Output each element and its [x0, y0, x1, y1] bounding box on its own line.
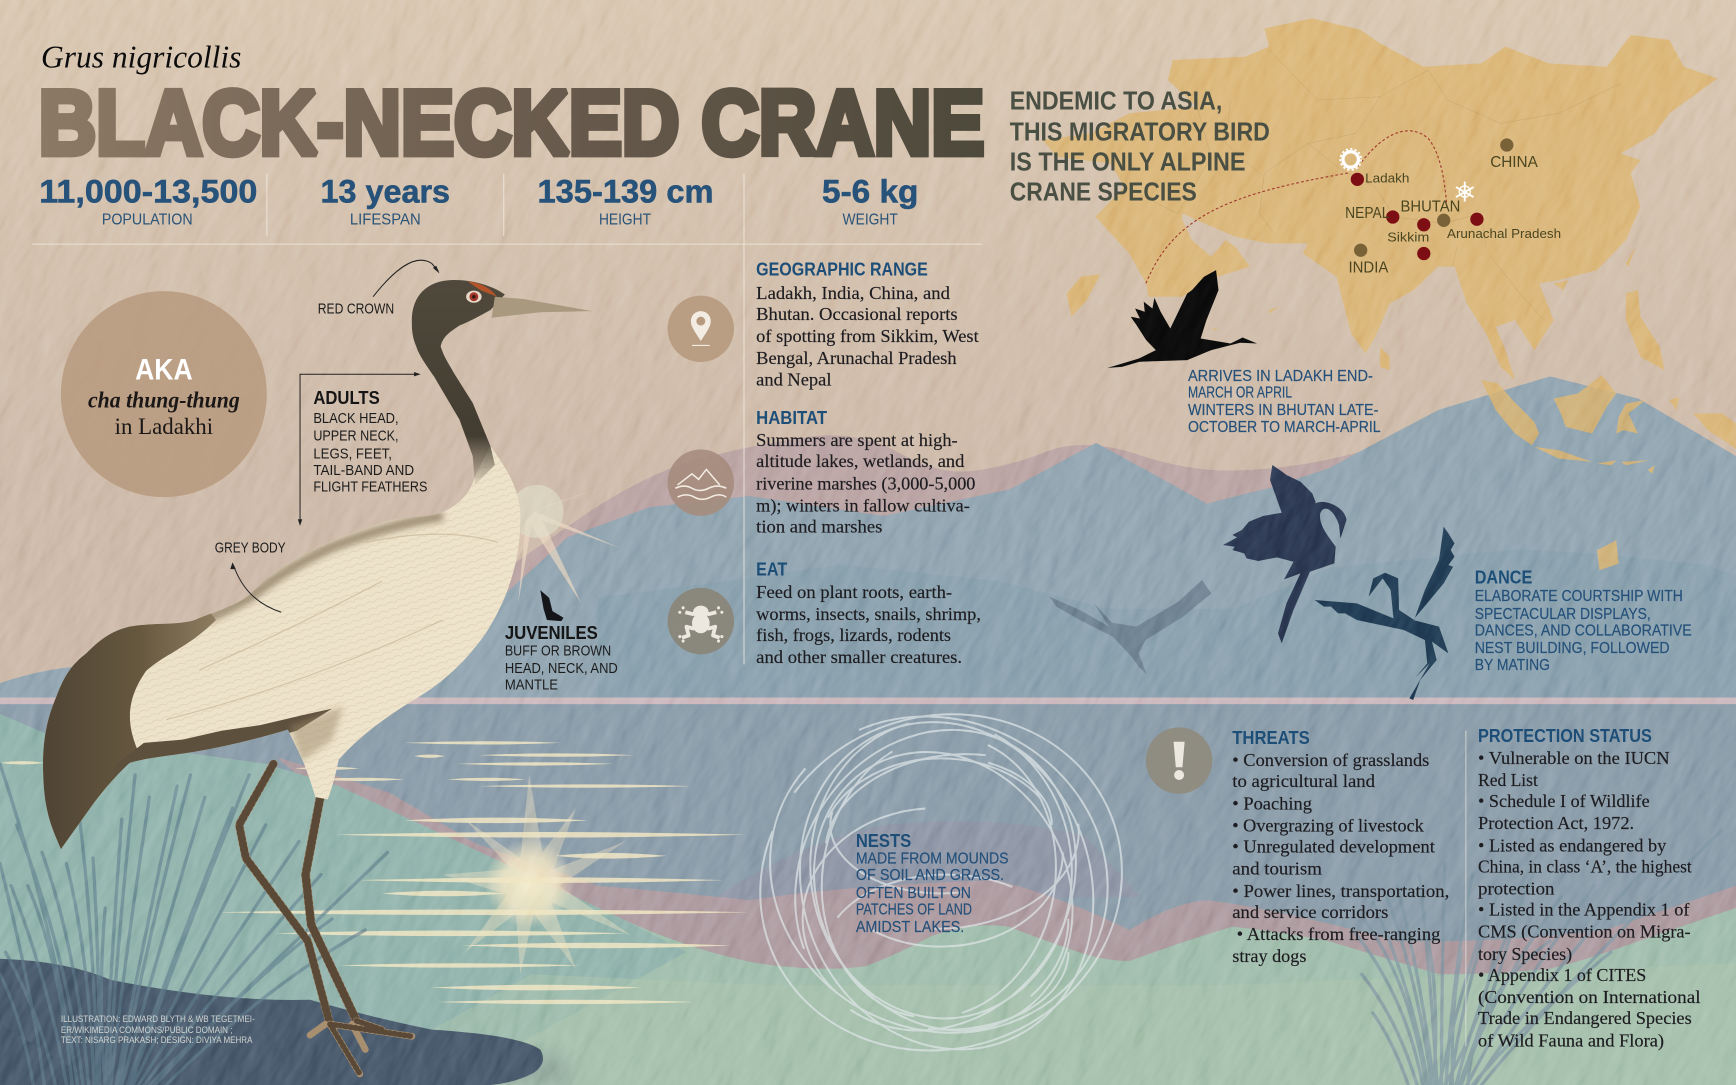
text: threats: stray dogs	[1232, 946, 1306, 966]
text: threats: • Conversion of grasslands	[1232, 750, 1429, 770]
crane: beak	[492, 297, 592, 318]
mountains: front range	[598, 549, 1736, 709]
stats row	[39, 174, 918, 229]
icon: frog	[668, 588, 734, 654]
text: protection status: of Wild Fauna and Flora)	[1478, 1030, 1664, 1051]
text: geographic range: and Nepal	[756, 369, 831, 389]
text: eat: fish, frogs, lizards, rodents	[756, 625, 951, 645]
text: habitat: tion and marshes	[756, 517, 882, 537]
text: nests: OFTEN BUILT ON	[856, 885, 971, 902]
crane: eye	[466, 291, 482, 303]
text: endemic statement: IS THE ONLY ALPINE	[1010, 148, 1246, 176]
text: nests: NESTS	[856, 830, 911, 851]
label: adults: TAIL-BAND AND	[313, 462, 414, 479]
text: dance: BY MATING	[1475, 657, 1550, 674]
text: geographic range: Bhutan. Occasional reports	[756, 304, 958, 324]
text: geographic range: Bengal, Arunachal Pradesh	[756, 348, 957, 368]
text: protection status: protection	[1478, 879, 1554, 899]
text: migration timing	[1188, 368, 1381, 436]
text: dance: ELABORATE COURTSHIP WITH	[1475, 588, 1683, 605]
horizon line	[0, 698, 1736, 704]
reflected pink mountain band	[277, 757, 1736, 996]
text: protection status: • Vulnerable on the IUCN	[1478, 748, 1670, 768]
text: endemic statement: THIS MIGRATORY BIRD	[1010, 119, 1270, 147]
text: threats: to agricultural land	[1232, 771, 1375, 791]
text: habitat: riverine marshes (3,000-5,000	[756, 473, 975, 494]
silhouettes: dancing cranes	[1049, 465, 1454, 700]
text: endemic statement	[1010, 88, 1270, 206]
map: labels: CHINA	[1490, 154, 1538, 171]
icon: exclamation	[1146, 727, 1212, 794]
text: threats: • Power lines, transportation,	[1232, 881, 1449, 901]
text: geographic range	[756, 259, 979, 389]
green shore	[0, 714, 1736, 1085]
icon: snowflake	[1456, 182, 1474, 202]
stat: population	[39, 174, 257, 229]
crane: feather scallops	[130, 451, 520, 799]
text: threats: • Overgrazing of livestock	[1232, 815, 1425, 835]
text: habitat: altitude lakes, wetlands, and	[756, 451, 964, 471]
credits	[61, 1014, 255, 1045]
crane: under-wing band	[111, 709, 332, 781]
text: nests	[856, 830, 1009, 936]
icon: location pin	[668, 296, 734, 362]
text: protection status	[1478, 725, 1701, 1051]
island shadow	[332, 1046, 570, 1085]
text: nests: MADE FROM MOUNDS	[856, 851, 1009, 868]
stat: weight: WEIGHT	[843, 211, 898, 229]
map: labels: Sikkim	[1387, 229, 1429, 244]
text: dance: NEST BUILDING, FOLLOWED	[1475, 640, 1670, 657]
icon: sun	[1340, 149, 1361, 170]
sun reflection with cream bars	[0, 741, 750, 1004]
crane: rump and tail	[43, 614, 216, 849]
text: protection status: PROTECTION STATUS	[1478, 725, 1652, 746]
island	[0, 959, 543, 1085]
text: dance: SPECTACULAR DISPLAYS,	[1475, 606, 1651, 623]
text: habitat: Summers are spent at high-	[756, 430, 958, 450]
text: protection status: (Convention on International	[1478, 987, 1701, 1008]
map: labels: INDIA	[1348, 259, 1389, 276]
text: migration timing: MARCH OR APRIL	[1188, 384, 1292, 401]
stat: height: 135-139 cm	[538, 174, 714, 210]
map: labels: Ladakh	[1365, 171, 1409, 186]
text: geographic range: of spotting from Sikkim, West	[756, 326, 979, 346]
label: adults: LEGS, FEET,	[313, 445, 392, 462]
sun above horizon	[504, 485, 620, 603]
label: juveniles: JUVENILES	[505, 622, 598, 643]
crane: feather strokes	[166, 534, 498, 720]
text: protection status: Red List	[1478, 770, 1538, 790]
crane: head and neck	[412, 280, 505, 485]
stat: population: 11,000-13,500	[39, 174, 257, 210]
text: protection status: • Listed as endangered by	[1478, 835, 1666, 855]
text: habitat	[756, 407, 975, 537]
text: threats: • Attacks from free-ranging	[1237, 924, 1440, 944]
label: adults: BLACK HEAD,	[313, 410, 399, 427]
silhouette: flying crane	[1108, 270, 1257, 368]
text: migration timing: ARRIVES IN LADAKH END-	[1188, 368, 1373, 385]
label: adults: FLIGHT FEATHERS	[313, 479, 427, 496]
label: juveniles	[505, 622, 618, 694]
crane: grey back shading	[184, 511, 447, 628]
circle: AKA badge	[61, 291, 267, 497]
text: protection status: CMS (Convention on Migra-	[1478, 922, 1691, 943]
text: habitat: HABITAT	[756, 407, 827, 428]
circle: AKA badge: cha thung-thung	[88, 387, 240, 413]
label: red crown	[318, 260, 440, 317]
crane: legs and feet	[239, 764, 412, 1074]
text: protection status: • Listed in the Appendix 1 of	[1478, 900, 1690, 920]
mountains: mauve back range	[443, 383, 1736, 709]
stat: lifespan: 13 years	[321, 174, 450, 210]
text: protection status: Trade in Endangered Species	[1478, 1008, 1692, 1028]
map: red sighting dots	[1351, 173, 1484, 260]
text: threats: THREATS	[1232, 727, 1310, 748]
text: protection status: • Appendix 1 of CITES	[1478, 965, 1646, 985]
stat: height	[538, 174, 714, 229]
text: eat: Feed on plant roots, earth-	[756, 582, 952, 602]
text: threats	[1232, 727, 1449, 966]
label: grey body: GREY BODY	[215, 539, 286, 556]
stat: lifespan	[321, 174, 450, 229]
text: dance: DANCE	[1475, 566, 1532, 587]
text: migration timing: WINTERS IN BHUTAN LATE-	[1188, 402, 1378, 419]
stat: height: HEIGHT	[599, 211, 651, 229]
icon: mountains and water	[668, 450, 734, 516]
text: eat: worms, insects, snails, shrimp,	[756, 604, 981, 624]
label: juveniles: MANTLE	[505, 677, 558, 694]
grass: left reeds	[0, 764, 388, 1085]
text: nests: OF SOIL AND GRASS.	[856, 867, 1004, 884]
credits: TEXT: NISARG PRAKASH; DESIGN: DIVIYA MEHRA	[61, 1035, 253, 1045]
map of Asia	[1043, 18, 1736, 570]
map: labels: Arunachal Pradesh	[1447, 226, 1561, 241]
label: adults	[298, 372, 427, 526]
text: threats: and tourism	[1232, 859, 1322, 879]
map: brown country dots	[1354, 138, 1513, 257]
text: threats: • Poaching	[1232, 793, 1312, 813]
stat: weight	[822, 174, 918, 229]
water	[0, 702, 1736, 1085]
label: adults: ADULTS	[313, 387, 380, 408]
text: protection status: tory Species)	[1478, 944, 1572, 965]
text: protection status: Protection Act, 1972.	[1478, 813, 1634, 833]
map: labels: NEPAL	[1345, 205, 1390, 222]
text: threats: and service corridors	[1232, 902, 1388, 922]
text: protection status: • Schedule I of Wildlife	[1478, 791, 1650, 811]
text: threats: • Unregulated development	[1232, 836, 1435, 856]
text: nests: AMIDST LAKES.	[856, 919, 964, 936]
text: migration timing: OCTOBER TO MARCH-APRIL	[1188, 419, 1381, 436]
text: eat	[756, 559, 981, 667]
label: red crown: RED CROWN	[318, 300, 394, 317]
silhouette: juvenile crane	[540, 590, 564, 621]
crane: red crown	[467, 281, 497, 297]
text: geographic range: Ladakh, India, China, and	[756, 283, 950, 303]
label: juveniles: BUFF OR BROWN	[505, 642, 611, 659]
circle: AKA badge: in Ladakhi	[115, 414, 214, 440]
text: nests: PATCHES OF LAND	[856, 901, 972, 918]
label: adults: UPPER NECK,	[313, 428, 399, 445]
title: BLACK-NECKED CRANE	[39, 73, 984, 174]
map: labels: BHUTAN	[1401, 198, 1460, 215]
grass: right reeds	[1353, 830, 1722, 1085]
mountains: blue range	[0, 376, 1736, 709]
text: habitat: m); winters in fallow cultiva-	[756, 495, 970, 517]
stat: population: POPULATION	[102, 211, 193, 229]
text: eat: and other smaller creatures.	[756, 647, 962, 667]
map: migration routes	[1146, 131, 1447, 283]
credits: ER/WIKIMEDIA COMMONS/PUBLIC DOMAIN ;	[61, 1025, 232, 1035]
label: grey body	[215, 539, 286, 612]
text: geographic range: GEOGRAPHIC RANGE	[756, 259, 928, 280]
text: eat: EAT	[756, 559, 787, 580]
text: dance	[1475, 566, 1692, 674]
crane illustration	[22, 280, 592, 1074]
credits: ILLUSTRATION: EDWARD BLYTH & WB TEGETMEI-	[61, 1014, 255, 1024]
subtitle: scientific name: Grus nigricollis	[41, 39, 241, 75]
text: protection status: China, in class ‘A’, the highest	[1478, 856, 1692, 876]
label: juveniles: HEAD, NECK, AND	[505, 660, 618, 677]
map: labels	[1345, 154, 1561, 276]
stat: weight: 5-6 kg	[822, 174, 918, 210]
text: dance: DANCES, AND COLLABORATIVE	[1475, 622, 1692, 639]
text: endemic statement: CRANE SPECIES	[1010, 178, 1197, 206]
crane: body	[43, 446, 520, 849]
teal left shore	[0, 714, 686, 1085]
stat: lifespan: LIFESPAN	[350, 211, 421, 229]
faint mauve hump in water	[709, 821, 1140, 902]
nest scribble	[713, 662, 1170, 1085]
text: endemic statement: ENDEMIC TO ASIA,	[1010, 88, 1222, 116]
map: country borders	[1124, 50, 1621, 320]
circle: AKA badge: AKA	[135, 354, 193, 387]
